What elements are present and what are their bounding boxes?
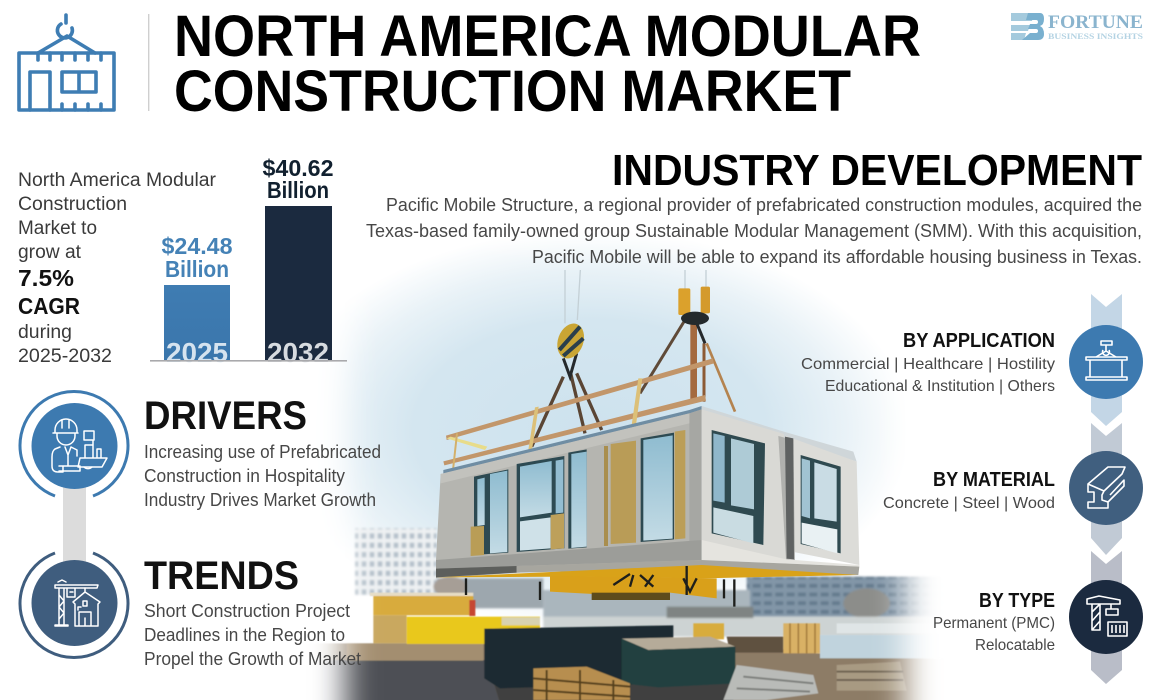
segment: by type: Permanent (PMC) xyxy=(933,615,1055,632)
trends text xyxy=(144,601,361,669)
icon: crane hook lifting a container xyxy=(19,15,114,110)
segment: by material: BY MATERIAL xyxy=(933,469,1055,491)
windows long facade xyxy=(474,469,508,555)
market growth statement: Construction xyxy=(18,194,127,215)
wooden lifting beams xyxy=(443,358,714,470)
bar 2032 xyxy=(262,155,334,368)
bar 2025: 2025 xyxy=(166,337,228,368)
vertical header divider xyxy=(148,14,149,111)
icon circle: material xyxy=(1069,451,1143,525)
connector between drivers and trends xyxy=(63,485,86,565)
industry development paragraph: Pacific Mobile will be able to expand its affordable housing business in Texas. xyxy=(532,247,1142,267)
icon: engineer with building model xyxy=(52,419,107,472)
drivers text: Construction in Hospitality xyxy=(144,466,345,486)
segment: by application: Commercial | Healthcare | Hostility xyxy=(801,356,1055,373)
bar 2025 xyxy=(162,233,232,368)
stacked panels xyxy=(723,665,818,700)
windows right facade xyxy=(712,430,765,545)
right facade xyxy=(702,409,787,560)
crane hook blocks xyxy=(553,287,710,362)
yellow site containers xyxy=(373,596,473,615)
icon: crane and cargo container xyxy=(1087,596,1127,636)
market growth statement: CAGR xyxy=(18,293,80,319)
segment: by material xyxy=(883,469,1055,512)
title xyxy=(174,4,921,124)
industry development paragraph: Pacific Mobile Structure, a regional provider of prefabricated construction modules, acquired the xyxy=(386,195,1142,215)
market growth statement: during xyxy=(18,322,72,343)
bar chart: market size 2025 vs 2032 xyxy=(150,155,347,368)
trends heading: TRENDS xyxy=(144,554,299,598)
logo mark xyxy=(1011,13,1044,40)
segment: by application xyxy=(801,330,1055,395)
segment: by type: BY TYPE xyxy=(979,590,1055,612)
photo: modular building unit lifted by crane over construction site xyxy=(320,247,929,700)
dark equipment boxes xyxy=(484,625,673,688)
drivers text xyxy=(144,442,381,510)
bar 2032: Billion xyxy=(267,177,329,203)
trends text: Propel the Growth of Market xyxy=(144,649,361,669)
wood panels xyxy=(471,526,484,556)
icon: lifted container xyxy=(1086,341,1127,380)
floor slab xyxy=(436,540,702,569)
drivers text: Industry Drives Market Growth xyxy=(144,490,376,510)
chevron column xyxy=(1091,294,1122,684)
trends text: Short Construction Project xyxy=(144,601,350,621)
roof edge xyxy=(443,406,702,474)
segment: by material: Concrete | Steel | Wood xyxy=(883,495,1055,512)
market growth statement: North America Modular xyxy=(18,170,217,191)
icon: steel beam xyxy=(1088,467,1125,508)
construction ground xyxy=(300,593,967,700)
segment: by application: Educational & Institution | Others xyxy=(825,378,1055,395)
market growth statement xyxy=(18,170,217,367)
yellow underside and frame xyxy=(437,565,858,578)
modular unit xyxy=(436,406,859,607)
trends text: Deadlines in the Region to xyxy=(144,625,345,645)
crane cables xyxy=(532,270,735,447)
market growth statement: 2025-2032 xyxy=(18,346,112,367)
segment: by type xyxy=(933,590,1055,654)
bar 2032: 2032 xyxy=(267,337,329,368)
logo: Fortune Business Insights: FORTUNE xyxy=(1048,13,1143,33)
icon: tower crane with house xyxy=(55,580,100,626)
bar 2025: Billion xyxy=(165,256,229,282)
bar 2032: $40.62 xyxy=(262,155,334,181)
photo scene xyxy=(300,270,967,700)
drivers heading: DRIVERS xyxy=(144,394,307,438)
market growth statement: grow at xyxy=(18,242,82,263)
long facade xyxy=(436,409,702,578)
title: CONSTRUCTION MARKET xyxy=(174,59,851,124)
logo: Fortune Business Insights: BUSINESS INSIGHTS xyxy=(1048,32,1143,41)
drivers text: Increasing use of Prefabricated xyxy=(144,442,381,462)
fence xyxy=(783,623,820,653)
icon circle: application xyxy=(1069,325,1143,399)
title: NORTH AMERICA MODULAR xyxy=(174,4,921,69)
background buildings xyxy=(355,528,960,637)
icon circle: type xyxy=(1069,580,1143,654)
logo: Fortune Business Insights xyxy=(1011,13,1143,41)
market growth statement: 7.5% xyxy=(18,265,74,291)
photo sky xyxy=(339,247,884,612)
pallets xyxy=(533,667,630,700)
segment: by type: Relocatable xyxy=(975,637,1055,654)
industry development paragraph xyxy=(366,195,1142,267)
segment: by application: BY APPLICATION xyxy=(903,330,1055,352)
market growth statement: Market to xyxy=(18,218,97,239)
icon circle: trends xyxy=(20,553,128,658)
icon circle: drivers xyxy=(20,391,128,496)
industry development paragraph: Texas-based family-owned group Sustainable Modular Management (SMM). With this acquisition, xyxy=(366,221,1142,241)
bar 2025: $24.48 xyxy=(162,233,232,259)
